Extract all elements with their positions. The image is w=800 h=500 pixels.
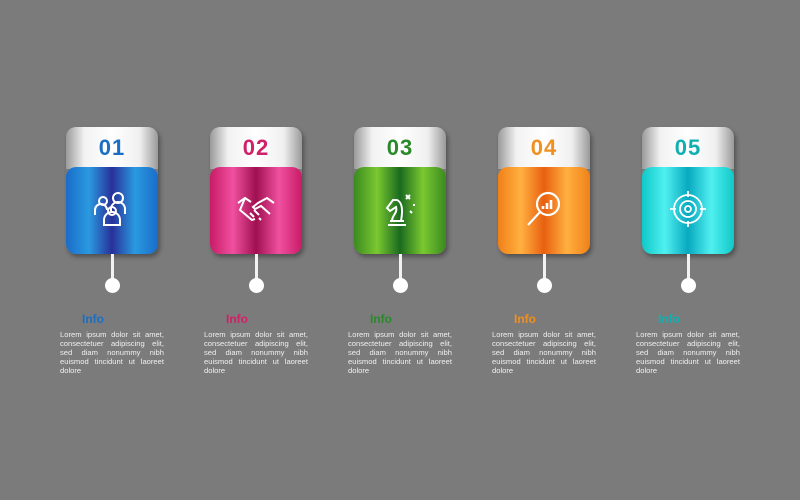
icon: magnifier chart <box>527 192 560 226</box>
heading 4: Info <box>514 312 536 326</box>
card 4: 04 <box>531 135 557 160</box>
card 5: 05 <box>675 135 701 160</box>
card 3: 03 <box>387 135 413 160</box>
icon: target gear <box>670 191 706 227</box>
step 2 <box>204 127 308 375</box>
card 1: 01 <box>99 135 125 160</box>
card 1 <box>66 127 158 254</box>
card 3 <box>354 127 446 254</box>
heading 5: Info <box>658 312 680 326</box>
step 5 <box>636 127 740 375</box>
card 2 <box>210 127 302 254</box>
card 2: 02 <box>243 135 269 160</box>
text 4: Lorem ipsum dolor sit amet, consectetuer adipiscing elit, sed diam nonummy nibh euismod tincidunt ut laoreet dolore <box>492 330 596 375</box>
text 3: Lorem ipsum dolor sit amet, consectetuer adipiscing elit, sed diam nonummy nibh euismod tincidunt ut laoreet dolore <box>348 330 452 375</box>
text 2: Lorem ipsum dolor sit amet, consectetuer adipiscing elit, sed diam nonummy nibh euismod tincidunt ut laoreet dolore <box>204 330 308 375</box>
card 5 <box>642 127 734 254</box>
heading 3: Info <box>370 312 392 326</box>
icon: people <box>94 192 126 226</box>
text 5: Lorem ipsum dolor sit amet, consectetuer adipiscing elit, sed diam nonummy nibh euismod tincidunt ut laoreet dolore <box>636 330 740 375</box>
icon: chess knight <box>386 194 415 226</box>
card 4 <box>498 127 590 254</box>
step 3 <box>348 127 452 375</box>
heading 2: Info <box>226 312 248 326</box>
icon: handshake <box>238 196 274 222</box>
text 1: Lorem ipsum dolor sit amet, consectetuer adipiscing elit, sed diam nonummy nibh euismod tincidunt ut laoreet dolore <box>60 330 164 375</box>
step 1 <box>60 127 164 375</box>
step 4 <box>492 127 596 375</box>
heading 1: Info <box>82 312 104 326</box>
